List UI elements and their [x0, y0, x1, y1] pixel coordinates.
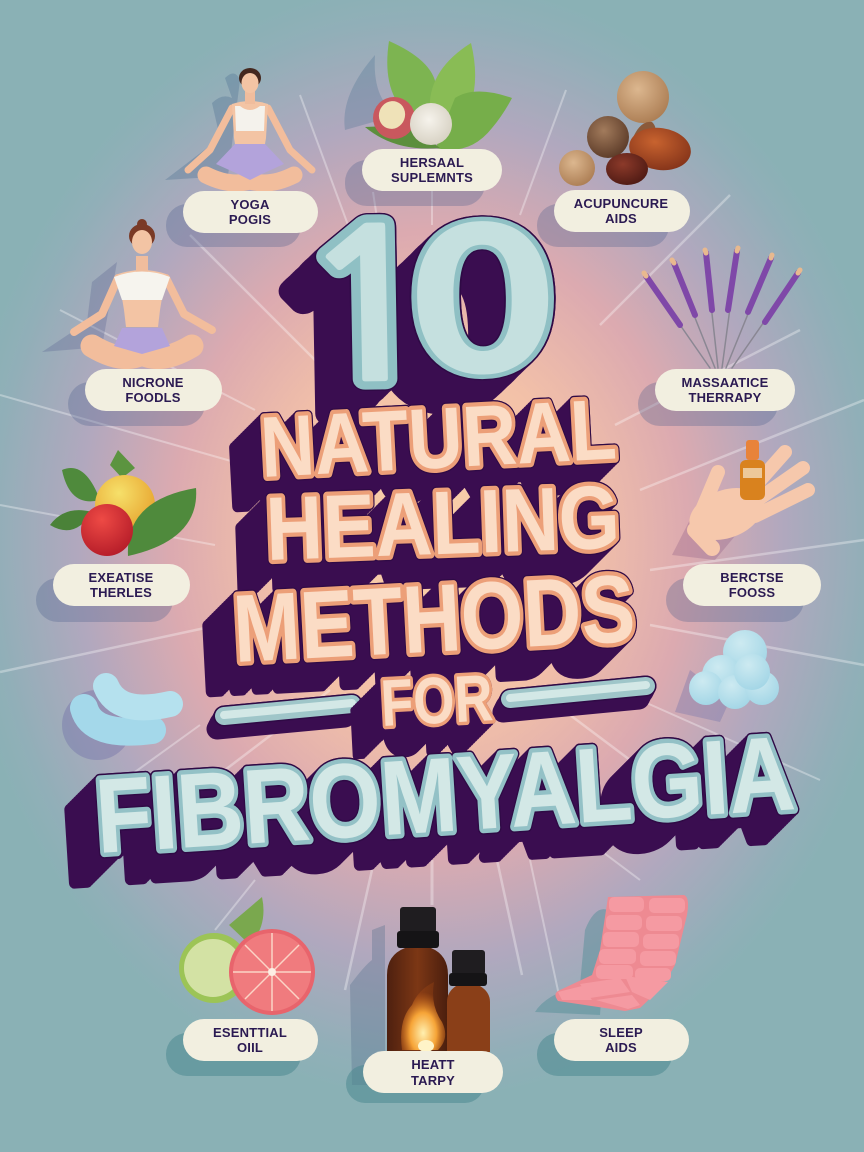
pill shadow — [166, 204, 301, 247]
label: HERSAAL — [400, 155, 464, 170]
label: THERRAPY — [688, 390, 762, 405]
pill — [53, 564, 190, 606]
icon: meditating woman — [165, 68, 312, 183]
title: NATURAL: NATURAL — [258, 381, 619, 496]
label: THERLES — [90, 585, 152, 600]
pill shadow — [638, 382, 778, 426]
label: ESENTTIAL — [213, 1025, 287, 1040]
pill shadow — [345, 160, 485, 206]
title: HEALING: HEALING — [264, 468, 621, 580]
label: ACUPUNCURE — [574, 196, 668, 211]
title: 10: 1 — [294, 204, 443, 414]
title: 10: 1 — [294, 204, 443, 414]
pill — [554, 1019, 689, 1061]
pill — [554, 190, 690, 232]
icon: fruit and leaves — [50, 450, 196, 556]
pill shadow — [36, 578, 173, 622]
title: HEALING: HEALING — [264, 468, 621, 580]
item: massage therapy — [638, 248, 800, 426]
label: AIDS — [605, 211, 637, 226]
title — [92, 133, 798, 876]
pill — [183, 1019, 318, 1061]
icon: amber bottles with flame — [350, 907, 490, 1085]
title: 10: 0 — [403, 133, 562, 432]
icon: hand holding bottle — [672, 440, 808, 560]
label: SUPLEMNTS — [391, 170, 473, 185]
icon: meditating woman — [42, 219, 212, 358]
label: NICRONE — [122, 375, 184, 390]
item: acupuncture aids — [537, 71, 694, 247]
icon: nuts and seeds — [559, 71, 694, 186]
item: herbal supplements — [344, 41, 512, 206]
label: AIDS — [605, 1040, 637, 1055]
pill shadow — [666, 578, 804, 622]
title: 10: 0 — [403, 133, 562, 432]
item: heat therapy — [346, 907, 503, 1103]
label: TARPY — [411, 1073, 455, 1088]
item: exercise foods — [666, 440, 821, 622]
pill shadow — [166, 1033, 301, 1076]
icon: leaves and nuts — [344, 41, 512, 150]
pill — [683, 564, 821, 606]
title: METHODS: METHODS — [230, 555, 638, 683]
item: sleep aids — [535, 895, 689, 1076]
decorative bar right — [510, 685, 646, 699]
pill — [183, 191, 318, 233]
pill — [362, 149, 502, 191]
item: exercise therapies — [36, 450, 196, 622]
label: OIIL — [237, 1040, 263, 1055]
label: FOOSS — [729, 585, 775, 600]
icon: blue curved capsules — [62, 686, 170, 760]
label: FOODLS — [125, 390, 181, 405]
item: essential oil — [166, 897, 318, 1076]
icon: pink cushioned mat — [535, 895, 688, 1015]
icon: acupuncture needles — [644, 248, 800, 368]
pill shadow — [346, 1065, 484, 1103]
title: METHODS: METHODS — [230, 555, 638, 683]
label: BERCTSE — [720, 570, 784, 585]
item: nicrone foods — [42, 219, 222, 426]
sunburst rays — [0, 90, 864, 1000]
icon: citrus slices — [179, 897, 315, 1015]
icon: blue cloud shape — [675, 630, 779, 722]
label: SLEEP — [599, 1025, 643, 1040]
pill — [655, 369, 795, 411]
decorative bar left — [224, 703, 352, 716]
label: EXEATISE — [89, 570, 154, 585]
title: 10 — [294, 133, 562, 432]
pill shadow — [537, 204, 669, 247]
label: MASSAATICE — [682, 375, 769, 390]
label: HEATT — [411, 1057, 455, 1072]
pill — [85, 369, 222, 411]
title: NATURAL: NATURAL — [258, 381, 619, 496]
pill shadow — [68, 382, 205, 426]
label: POGIS — [229, 212, 271, 227]
label: YOGA — [230, 197, 270, 212]
pill shadow — [537, 1033, 672, 1076]
pill — [363, 1051, 503, 1093]
title: FOR: FOR — [379, 660, 495, 740]
item: yoga poses — [165, 68, 318, 247]
